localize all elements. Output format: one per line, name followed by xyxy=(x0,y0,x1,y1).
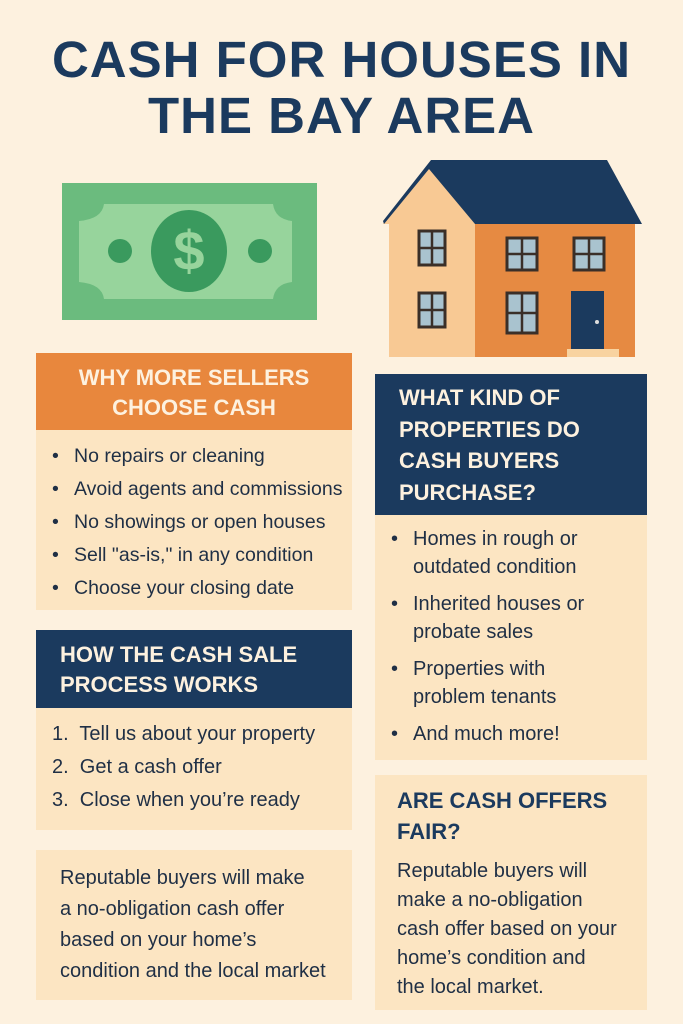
list xyxy=(36,430,352,610)
heading: ARE CASH OFFERS xyxy=(397,788,607,813)
panel: why sellers choose cash xyxy=(36,353,352,610)
list: problem tenants xyxy=(413,686,556,708)
text: home’s condition and xyxy=(397,947,586,969)
heading: WHY MORE SELLERS xyxy=(79,365,309,390)
text block: reputable buyers left: based on your home’s xyxy=(60,929,256,951)
list: Homes in rough or xyxy=(413,528,578,550)
heading xyxy=(397,788,607,844)
panel: are cash offers fair xyxy=(375,775,647,1010)
text: the local market. xyxy=(397,976,544,998)
heading: HOW THE CASH SALE xyxy=(60,642,297,667)
steps xyxy=(36,708,352,830)
text block: reputable buyers left: condition and the local market xyxy=(60,960,326,982)
text: make a no-obligation xyxy=(397,889,583,911)
heading: CASH BUYERS xyxy=(399,448,559,473)
panel: how process works xyxy=(36,630,352,830)
list: Properties with xyxy=(413,658,545,680)
list: Choose your closing date xyxy=(74,577,294,599)
list: Inherited houses or xyxy=(413,593,584,615)
list: No repairs or cleaning xyxy=(74,445,265,467)
title: CASH FOR HOUSES IN xyxy=(52,31,631,88)
heading: WHAT KIND OF xyxy=(399,385,560,410)
text: cash offer based on your xyxy=(397,918,617,940)
icon: dollar bill: $ xyxy=(173,219,205,282)
heading: PROPERTIES DO xyxy=(399,416,580,442)
steps: 3. Close when you’re ready xyxy=(52,789,300,811)
list: Avoid agents and commissions xyxy=(74,478,342,500)
heading xyxy=(36,630,352,708)
icon: house xyxy=(383,160,642,357)
heading: CHOOSE CASH xyxy=(112,395,276,420)
panel: what kind of properties xyxy=(375,374,647,760)
heading xyxy=(36,353,352,430)
heading: PURCHASE? xyxy=(399,480,536,504)
heading: FAIR? xyxy=(397,819,461,844)
list: outdated condition xyxy=(413,556,576,578)
list: probate sales xyxy=(413,621,533,643)
heading: PROCESS WORKS xyxy=(60,672,258,697)
title xyxy=(52,31,631,144)
text block: reputable buyers left: a no-obligation cash offer xyxy=(60,898,284,920)
text xyxy=(397,860,617,998)
steps: 2. Get a cash offer xyxy=(52,756,222,778)
heading xyxy=(375,374,647,515)
icon: dollar bill xyxy=(62,183,317,320)
list xyxy=(375,515,647,760)
list: No showings or open houses xyxy=(74,511,326,533)
text: Reputable buyers will xyxy=(397,860,587,882)
list: Sell "as-is," in any condition xyxy=(74,544,313,566)
steps: 1. Tell us about your property xyxy=(52,723,315,745)
text block: reputable buyers left: Reputable buyers will make xyxy=(60,867,305,889)
text block: reputable buyers left xyxy=(36,850,352,1000)
list: And much more! xyxy=(413,723,560,745)
title: THE BAY AREA xyxy=(148,87,535,144)
